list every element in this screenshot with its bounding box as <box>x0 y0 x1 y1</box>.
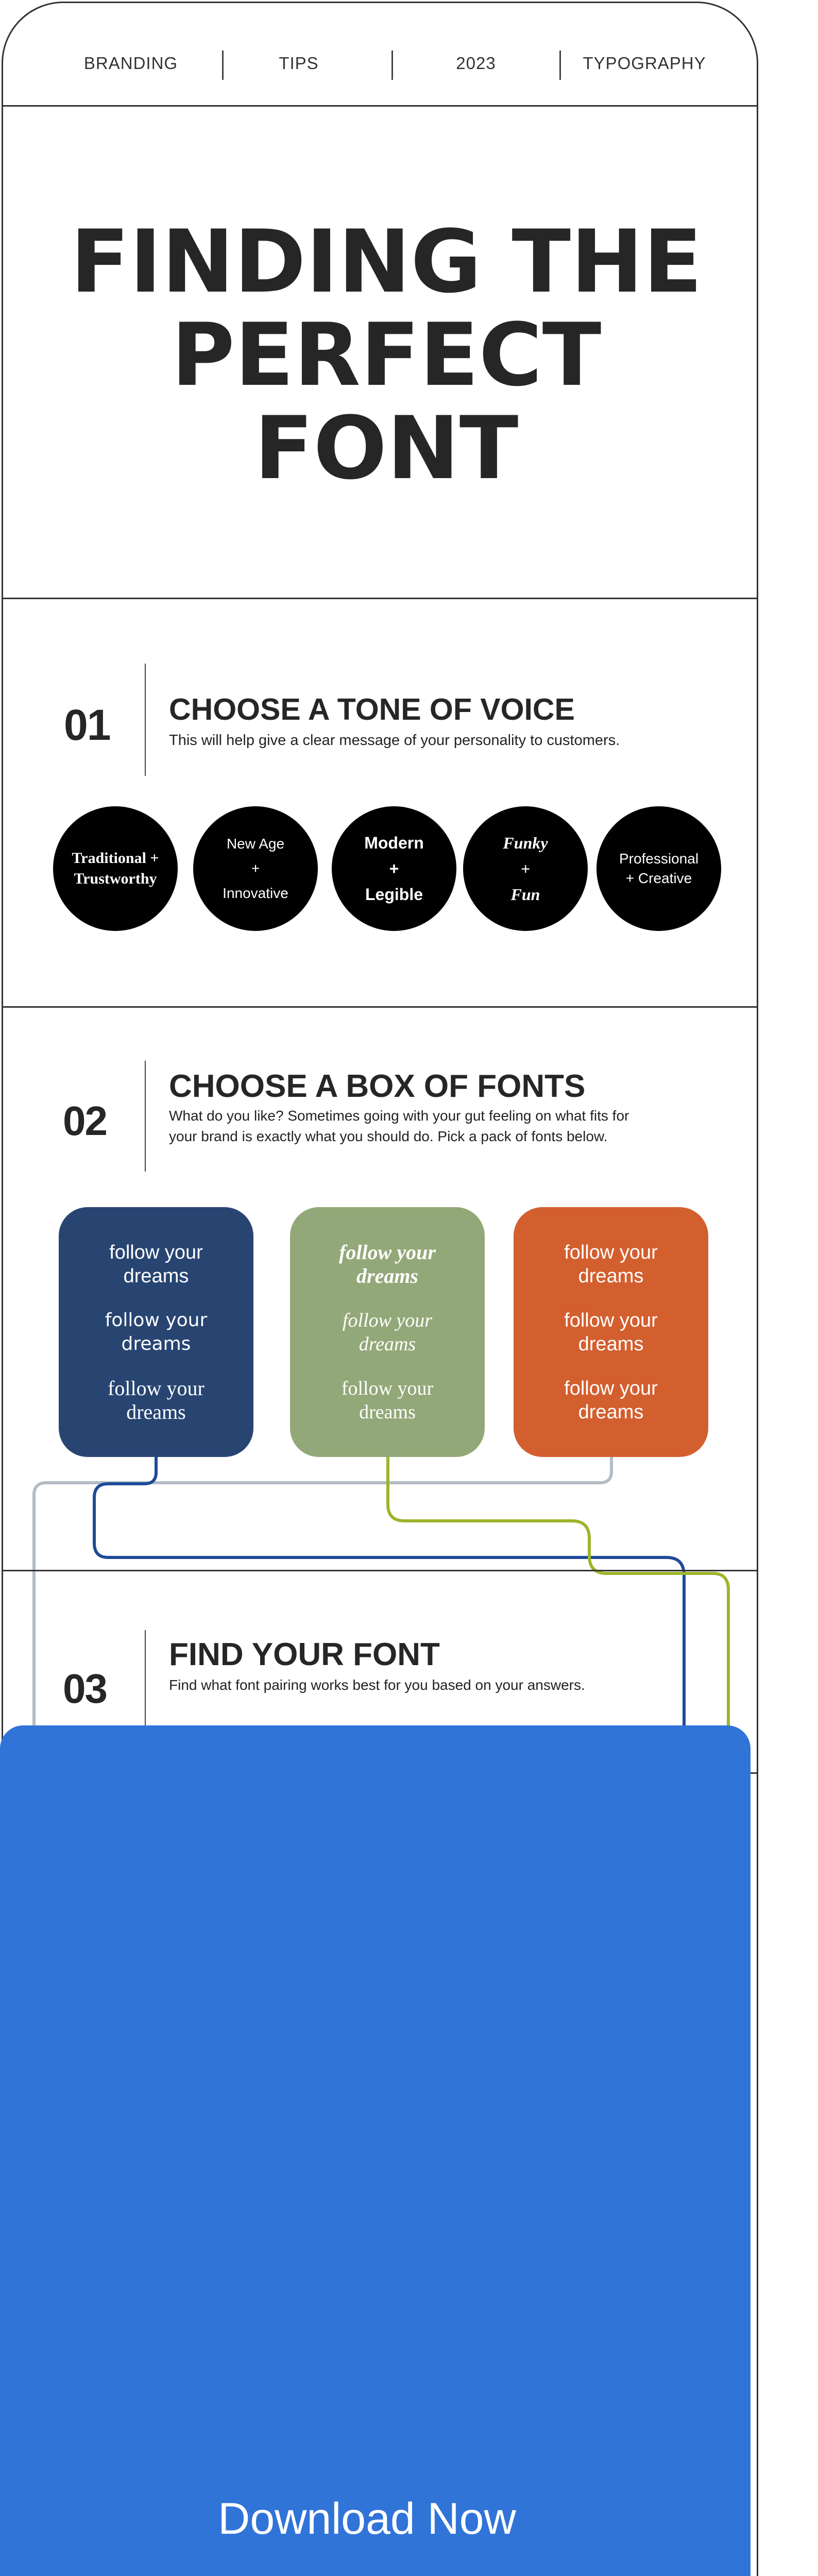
circle: modern: + <box>389 859 399 878</box>
font box: blue <box>59 1207 253 1457</box>
heading 03: FIND YOUR FONT <box>169 1637 440 1672</box>
section 03: find your font <box>63 1630 585 1725</box>
font box: blue: follow your <box>108 1377 204 1399</box>
subtitle 03: Find what font pairing works best for you based on your answers. <box>169 1677 585 1693</box>
circle: modern <box>332 806 456 931</box>
font box: orange: dreams <box>578 1401 643 1423</box>
connector lines <box>32 1457 730 1726</box>
title: PERFECT <box>172 304 601 405</box>
font box: orange: follow your <box>564 1310 658 1331</box>
font box: orange: follow your <box>564 1378 658 1399</box>
download label: Download Now <box>218 2494 516 2544</box>
font box: blue: dreams <box>122 1333 191 1354</box>
circle: new age: + <box>251 860 260 876</box>
number 01: 01 <box>64 701 110 749</box>
font box: blue: dreams <box>126 1400 186 1423</box>
circle: funky: + <box>521 859 530 878</box>
font box: orange: follow your <box>564 1242 658 1263</box>
number 03: 03 <box>63 1666 107 1711</box>
font box: orange <box>514 1207 708 1457</box>
title: FINDING THE <box>71 211 702 312</box>
font box: orange: dreams <box>578 1265 643 1287</box>
font box: green <box>290 1207 485 1457</box>
heading 01: CHOOSE A TONE OF VOICE <box>169 692 575 726</box>
download overlay <box>0 1725 751 2576</box>
circle: professional: Professional <box>619 851 698 867</box>
font box: green: dreams <box>359 1333 416 1355</box>
font box: green: follow your <box>342 1378 433 1399</box>
top navigation: BRANDING <box>84 54 178 73</box>
circle: funky: Fun <box>511 885 540 904</box>
number 02: 02 <box>63 1098 107 1144</box>
heading 02: CHOOSE A BOX OF FONTS <box>169 1069 585 1104</box>
font box: green: follow your <box>339 1241 436 1263</box>
font box: blue: follow your <box>105 1310 207 1330</box>
circle: modern: Legible <box>365 885 423 904</box>
tone circles <box>53 806 721 931</box>
top navigation: TYPOGRAPHY <box>583 54 706 73</box>
title <box>71 211 702 499</box>
subtitle 02: your brand is exactly what you should do. Pick a pack of fonts below. <box>169 1128 607 1144</box>
circle: funky: Funky <box>503 834 548 852</box>
font box: orange: dreams <box>578 1333 643 1355</box>
circle: professional <box>597 806 721 931</box>
circle: traditional: Trustworthy <box>74 870 157 887</box>
font box: blue: dreams <box>124 1265 189 1287</box>
subtitle 02: What do you like? Sometimes going with your gut feeling on what fits for <box>169 1108 629 1124</box>
top navigation: 2023 <box>456 54 496 73</box>
circle: new age: Innovative <box>223 885 288 901</box>
subtitle 01: This will help give a clear message of your personality to customers. <box>169 732 620 749</box>
font box: blue: follow your <box>109 1242 203 1263</box>
top navigation: TIPS <box>279 54 319 73</box>
section 01: tone of voice <box>53 664 721 931</box>
top navigation <box>84 50 706 80</box>
section 02: box of fonts <box>63 1061 629 1172</box>
font box: green: dreams <box>359 1401 416 1423</box>
circle: traditional <box>53 806 178 931</box>
circle: traditional: Traditional + <box>72 850 159 867</box>
font box: green: follow your <box>343 1310 432 1331</box>
font box: green: dreams <box>356 1264 418 1287</box>
circle: professional: + Creative <box>626 870 692 886</box>
title: FONT <box>254 398 518 499</box>
circle: new age <box>193 806 318 931</box>
circle: new age: New Age <box>227 836 284 852</box>
subtitle 02 <box>169 1108 629 1144</box>
circle: funky <box>463 806 588 931</box>
circle: modern: Modern <box>364 834 424 852</box>
